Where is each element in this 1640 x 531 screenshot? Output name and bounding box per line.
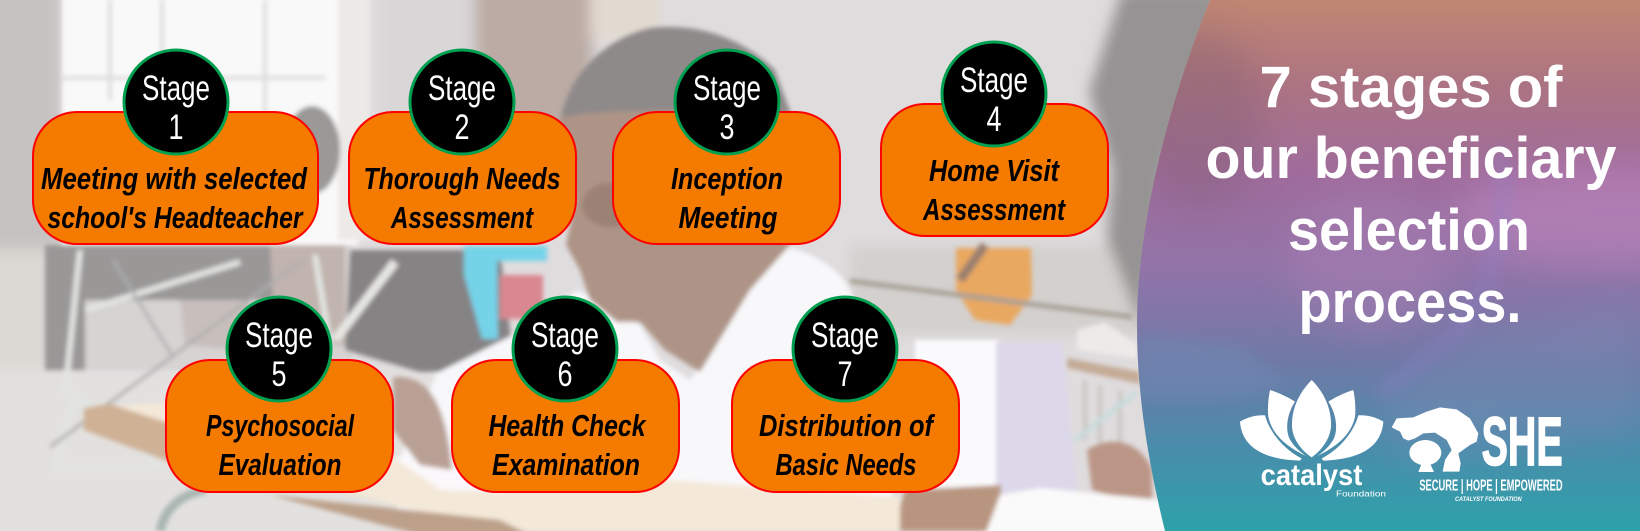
hand right: [1087, 442, 1152, 508]
stage 2: Thorough Needs: [364, 161, 560, 196]
hand: [393, 377, 452, 470]
logo: SHE: CATALYST FOUNDATION: [1455, 496, 1522, 503]
desk: [84, 403, 900, 531]
stage 7: Basic Needs: [776, 447, 916, 482]
stage 6: [452, 297, 679, 492]
desk leg: [160, 490, 205, 531]
stage 1: [33, 50, 318, 244]
stage 4: Assessment: [922, 192, 1066, 227]
stage 3: [613, 50, 840, 244]
stage 7: [732, 297, 959, 492]
title: our beneficiary: [1206, 126, 1616, 191]
bag, desk and book right: [1077, 322, 1137, 358]
stage 7: 7: [838, 355, 852, 394]
stage 5: [166, 297, 393, 492]
left seated student and benches: [62, 245, 352, 370]
stage 3: Inception: [671, 161, 783, 196]
stage 6: 6: [558, 355, 572, 394]
stage 7: Stage: [811, 316, 879, 355]
stage 3: 3: [720, 108, 734, 147]
girl shirt: [395, 246, 900, 531]
logo: SHE: [1392, 403, 1563, 503]
stage 5: Stage: [245, 316, 313, 355]
stage 1: school's Headteacher: [48, 200, 304, 235]
girl face: [560, 111, 790, 372]
title: 7 stages of: [1260, 55, 1563, 120]
title: process.: [1298, 270, 1522, 335]
stage 6: Stage: [531, 316, 599, 355]
cuff and forearm: [893, 485, 1001, 531]
stage 2: 2: [454, 108, 470, 147]
seated student with cyan scarf: [345, 250, 515, 372]
background student head: [282, 104, 342, 196]
foreground head right: [1089, 0, 1225, 330]
stage 1: Meeting with selected: [41, 161, 308, 196]
stage 6: Examination: [492, 447, 640, 482]
title: [1206, 55, 1616, 335]
stage 4: Home Visit: [929, 153, 1060, 188]
right gradient panel: [1137, 0, 1640, 531]
stage 5: Psychosocial: [206, 408, 355, 443]
stage 5: Evaluation: [218, 447, 342, 482]
stage 4: [881, 42, 1108, 236]
distant student: [956, 248, 1032, 325]
title: selection: [1288, 198, 1530, 263]
stage 1: 1: [168, 108, 184, 147]
logo: catalyst foundation: Foundation: [1336, 489, 1386, 499]
logo: catalyst foundation: [1240, 380, 1386, 499]
stage 4: 4: [986, 100, 1002, 139]
logo: catalyst foundation: catalyst: [1261, 459, 1363, 492]
logo: SHE: SHE: [1482, 403, 1563, 480]
stage 1: Stage: [142, 69, 210, 108]
stage 2: [349, 50, 576, 244]
stage 2: Stage: [428, 69, 496, 108]
stage 3: Stage: [693, 69, 761, 108]
window: [62, 0, 358, 245]
stage 3: Meeting: [678, 200, 778, 235]
stage 5: 5: [272, 355, 286, 394]
stage 6: Health Check: [488, 408, 647, 443]
stage 7: Distribution of: [759, 408, 935, 443]
girl hair: [560, 27, 795, 135]
stage 2: Assessment: [390, 200, 534, 235]
stage 4: Stage: [960, 61, 1028, 100]
